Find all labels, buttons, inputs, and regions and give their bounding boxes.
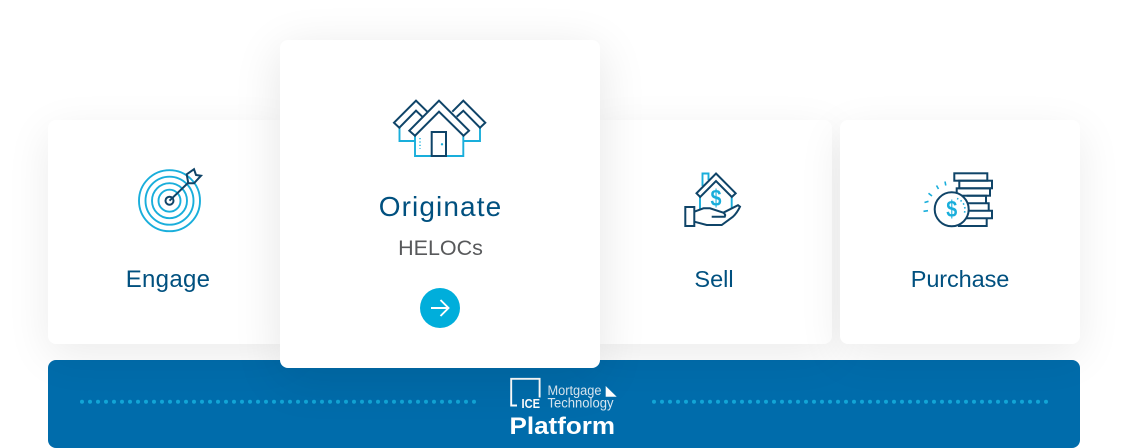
- icon: hand holding house: $: [710, 185, 722, 211]
- icon: coin stack: $: [946, 196, 957, 222]
- dotted line: left: [80, 400, 476, 404]
- logo: ICE Mortgage Technology Platform: Mortgage: [548, 383, 602, 398]
- label: Purchase: Purchase: [911, 266, 1009, 292]
- card: Purchase: [840, 120, 1080, 344]
- icon: coin stack: [923, 172, 993, 228]
- icon: arrow button: [420, 288, 460, 328]
- label: Engage: Engage: [126, 266, 210, 293]
- label: Sell: Sell: [694, 266, 734, 292]
- icon: houses: [392, 99, 487, 157]
- dotted line: right: [652, 400, 1048, 404]
- logo: ICE Mortgage Technology Platform: Technology: [548, 396, 614, 410]
- card: Engage: [48, 120, 290, 344]
- subheading: HELOCs: HELOCs: [398, 236, 483, 260]
- icon: hand holding house: [684, 172, 742, 227]
- logo: ICE Mortgage Technology Platform: Platform: [510, 413, 615, 440]
- logo: ICE Mortgage Technology Platform: [510, 378, 617, 440]
- heading: Originate: Originate: [379, 191, 502, 222]
- icon: target with arrow: [138, 168, 203, 232]
- platform bar: [48, 360, 1080, 448]
- card: Originate HELOCs: [280, 40, 600, 368]
- logo: ICE Mortgage Technology Platform: ICE: [522, 397, 540, 411]
- card: Sell: [590, 120, 832, 344]
